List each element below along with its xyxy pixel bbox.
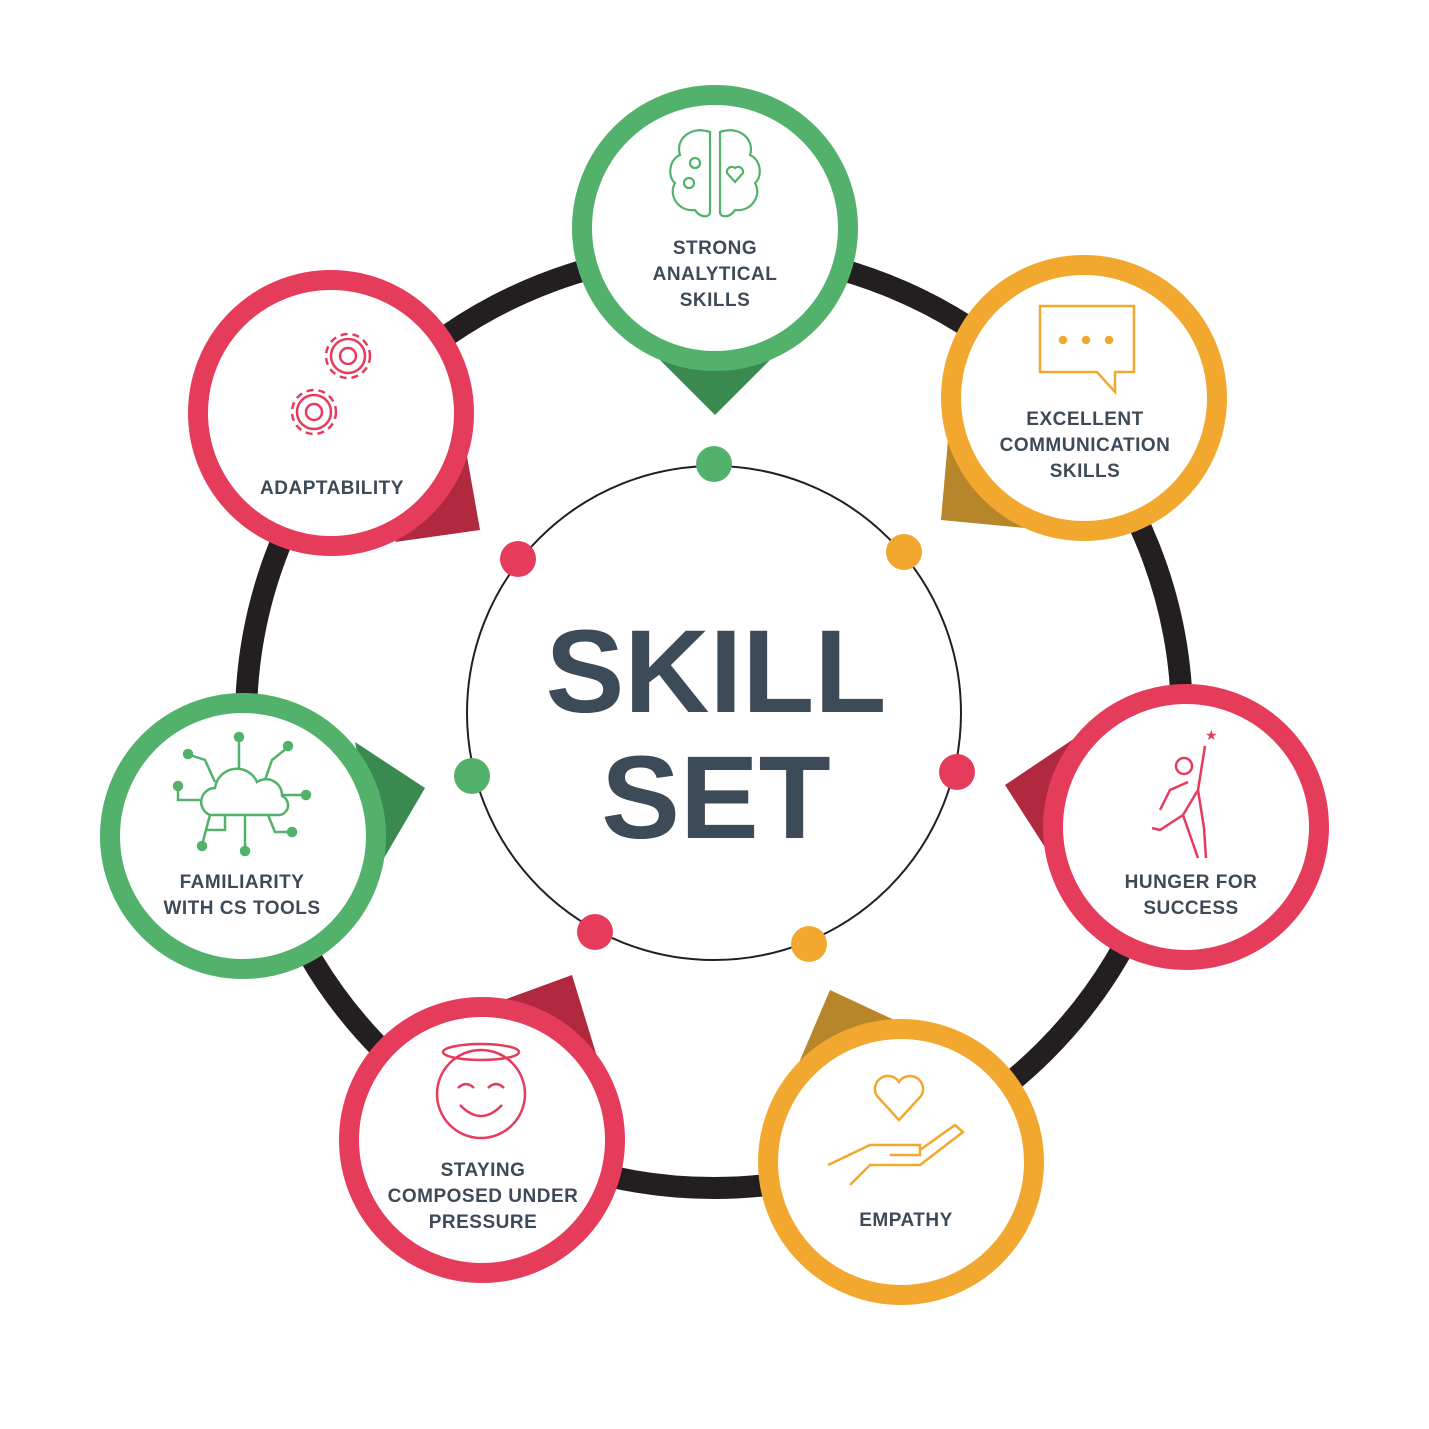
- panel: familiarity with cs tools: FAMILIARITY: [180, 872, 304, 893]
- inner circle: [467, 466, 961, 960]
- icon: halo smiley: [437, 1044, 525, 1138]
- panel: excellent communication skills: SKILLS: [1050, 461, 1120, 482]
- title: SKILL: [546, 606, 886, 738]
- title: [546, 606, 886, 864]
- icon: cloud network: [174, 733, 310, 855]
- outer ring: [246, 252, 1182, 1188]
- panel: familiarity with cs tools: WITH CS TOOLS: [163, 898, 321, 919]
- panel: strong analytical skills: ANALYTICAL: [653, 264, 777, 285]
- panel: hunger for success: SUCCESS: [1143, 898, 1239, 919]
- panel: empathy: [768, 1029, 1034, 1295]
- panel: familiarity with cs tools: [110, 703, 376, 969]
- title: SET: [601, 732, 831, 864]
- panel: empathy: EMPATHY: [859, 1210, 953, 1231]
- panel: strong analytical skills: SKILLS: [680, 290, 750, 311]
- panel: excellent communication skills: COMMUNICATION: [1000, 435, 1170, 456]
- pointers: [355, 355, 1075, 1065]
- panel: strong analytical skills: [582, 95, 848, 361]
- panel: hunger for success: [1053, 694, 1319, 960]
- icon: speech bubble: [1040, 306, 1134, 392]
- panel: hunger for success: HUNGER FOR: [1125, 872, 1257, 893]
- panel: staying composed under pressure: STAYING: [441, 1160, 525, 1181]
- panel: excellent communication skills: [951, 265, 1217, 531]
- icon: reaching figure: [1152, 727, 1218, 858]
- panel: excellent communication skills: EXCELLENT: [1026, 409, 1144, 430]
- dots on inner circle: [454, 446, 975, 962]
- panel: adaptability: ADAPTABILITY: [260, 478, 404, 499]
- panel: staying composed under pressure: [349, 1007, 615, 1273]
- icon: gears: [292, 334, 370, 434]
- panel: adaptability: [198, 280, 464, 546]
- panel: staying composed under pressure: PRESSURE: [429, 1212, 537, 1233]
- panel: staying composed under pressure: COMPOSED UNDER: [388, 1186, 578, 1207]
- icon: reaching figure: ★: [1205, 727, 1218, 743]
- icon: brain: [670, 130, 760, 216]
- panel: strong analytical skills: STRONG: [673, 238, 757, 259]
- icon: heart in hand: [828, 1076, 963, 1185]
